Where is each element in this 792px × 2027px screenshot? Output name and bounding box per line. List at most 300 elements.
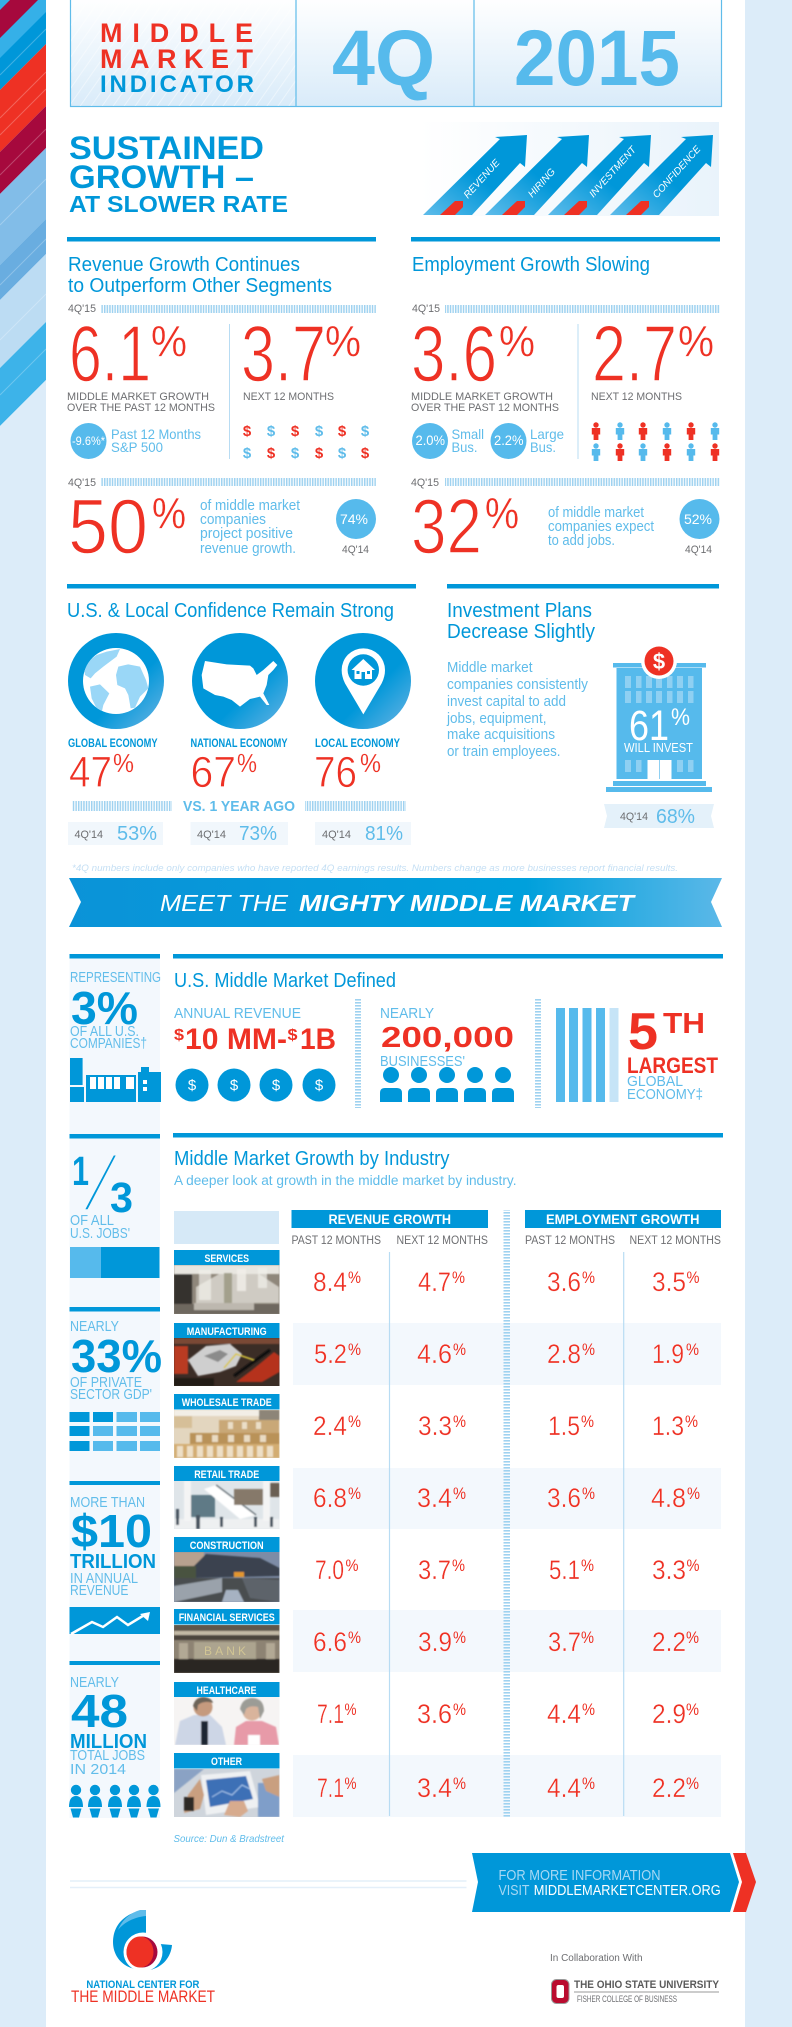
stat: 5th largest global economy: TH — [663, 1008, 705, 1040]
icon grid: dollar signs: $ — [243, 445, 252, 462]
category label: healthcare: HEALTHCARE — [196, 1685, 256, 1697]
row: services — [174, 1250, 700, 1314]
values: other: 3.4 — [417, 1773, 452, 1803]
sidebar: one third of jobs: 3 — [110, 1174, 133, 1222]
year: 2015 — [514, 13, 680, 102]
label: vs 1 year ago — [72, 798, 406, 815]
values: services: % — [686, 1268, 700, 1287]
category label: construction: CONSTRUCTION — [190, 1540, 264, 1552]
stat: 2.7 percent: 2.7 — [592, 309, 677, 398]
icon grid: people — [592, 422, 719, 461]
values: wholesale trade: 2.4 — [313, 1411, 347, 1441]
stat: local economy — [314, 736, 400, 797]
comparison: investment 4Q14: 68% — [656, 806, 695, 828]
panel: middle market growth by industry — [173, 1133, 723, 1817]
category label: services: SERVICES — [204, 1253, 249, 1265]
stat: annual revenue: $ — [188, 1077, 197, 1094]
left decorative stripes — [0, 0, 46, 426]
values: financial services: % — [686, 1628, 699, 1647]
table header: revenue growth: REVENUE GROWTH — [328, 1212, 451, 1227]
headline: sustained growth — [69, 130, 288, 217]
caption: past 12 months: OVER THE PAST 12 MONTHS — [67, 402, 215, 414]
values: other: 7.1 — [317, 1773, 344, 1803]
row: other — [174, 1753, 699, 1817]
stat: annual revenue: $ — [288, 1027, 298, 1044]
row: healthcare — [174, 1682, 699, 1745]
icon grid: dollar signs: $ — [361, 423, 370, 440]
sidebar: one third of jobs: 1 — [72, 1148, 89, 1194]
comparison: local 4Q14: 81% — [365, 823, 403, 845]
stat: national economy — [190, 736, 288, 797]
sidebar: 10 trillion revenue: TRILLION — [70, 1551, 156, 1573]
values: retail trade: 3.4 — [417, 1483, 452, 1513]
callout: small business — [412, 423, 484, 459]
values: healthcare: % — [582, 1700, 595, 1719]
values: retail trade: % — [687, 1484, 700, 1503]
chart: five bars — [556, 1008, 618, 1102]
callout: large business: Bus. — [530, 439, 556, 455]
call to action arrow: VISIT — [498, 1883, 530, 1899]
sidebar: 48 million jobs: TOTAL JOBS — [70, 1747, 145, 1764]
callout: large business — [490, 423, 564, 459]
caption: next 12 months: NEXT 12 MONTHS — [243, 391, 334, 403]
icon grid: dollar signs: $ — [291, 445, 300, 462]
sidebar: one third of jobs: / — [79, 1139, 123, 1228]
comparison: global 4Q14 — [68, 822, 163, 845]
banner: meet the mighty middle market: MEET THE — [160, 890, 288, 916]
icon grid: dollar signs: $ — [243, 423, 252, 440]
stat: 50 percent: 50 — [68, 482, 148, 570]
caption: past 12 months: MIDDLE MARKET GROWTH — [67, 391, 209, 403]
icon grid: dollar signs: $ — [315, 445, 324, 462]
sidebar: 3 percent of companies — [70, 954, 161, 1102]
category label: other: OTHER — [211, 1756, 242, 1768]
values: wholesale trade: 3.3 — [418, 1411, 452, 1441]
values: financial services — [313, 1627, 699, 1657]
stat: 5th largest global economy — [627, 1003, 718, 1103]
stat: 32 percent: 32 — [411, 482, 482, 570]
sidebar: 10 trillion revenue: IN ANNUAL — [70, 1570, 138, 1587]
stat: global economy: % — [113, 748, 134, 778]
sidebar: 33 percent of GDP — [70, 1307, 162, 1451]
stat: annual revenue: $ — [230, 1077, 239, 1094]
text: investment description: Middle market — [447, 660, 532, 676]
category label: financial services: FINANCIAL SERVICES — [179, 1612, 275, 1624]
comparison: local 4Q14: 4Q'14 — [322, 829, 351, 841]
stat: annual revenue: 10 MM- — [185, 1023, 287, 1056]
photo: dining table — [174, 1265, 280, 1314]
icon grid: dollar signs: $ — [291, 423, 300, 440]
values: other: % — [453, 1774, 466, 1793]
values: manufacturing: 5.2 — [314, 1339, 347, 1369]
panel: investment plans — [446, 584, 719, 828]
stat: annual revenue: 1B — [300, 1023, 336, 1056]
heading: investment plans: Decrease Slightly — [447, 621, 595, 643]
sidebar: 48 million jobs — [69, 1661, 160, 1818]
text: investment description: make acquisitions — [447, 727, 555, 743]
text: investment description: invest capital to add — [447, 694, 566, 710]
callout: small business: Small — [452, 426, 484, 442]
table header: employment growth: EMPLOYMENT GROWTH — [546, 1212, 700, 1227]
values: manufacturing: % — [453, 1340, 466, 1359]
values: services: 4.7 — [418, 1267, 451, 1297]
arrows graphic: HIRING — [526, 166, 558, 200]
banner: meet the mighty middle market — [69, 878, 722, 927]
category label: construction — [174, 1537, 280, 1552]
values: retail trade: % — [348, 1484, 361, 1503]
table header: revenue growth: NEXT 12 MONTHS — [396, 1233, 488, 1247]
values: financial services: % — [348, 1628, 361, 1647]
values: retail trade: 4.8 — [651, 1483, 686, 1513]
logo: national center for the middle market — [71, 1910, 215, 2006]
values: healthcare: % — [686, 1700, 699, 1719]
sidebar: 10 trillion revenue — [70, 1481, 160, 1634]
heading: revenue growth: to Outperform Other Segments — [68, 275, 332, 297]
icon grid: dollar signs: $ — [267, 445, 276, 462]
arrows graphic: INVESTMENT — [587, 144, 639, 200]
heading: growth by industry: Middle Market Growth by Industry — [174, 1148, 450, 1170]
panel: employment growth — [411, 237, 720, 570]
title: middle market indicator — [100, 18, 254, 98]
table header empty cell — [174, 1211, 279, 1244]
text: project positive revenue growth: revenue growth. — [200, 540, 296, 557]
icon: location pin — [315, 633, 411, 729]
stat: annual revenue — [174, 1005, 336, 1102]
header box — [70, 0, 722, 106]
stat: local economy: 76 — [314, 748, 357, 797]
panel: revenue growth — [67, 237, 376, 570]
stat: annual revenue: $ — [174, 1027, 184, 1044]
values: wholesale trade: % — [453, 1412, 466, 1431]
icon: globe — [68, 633, 164, 729]
stat: 6.1 percent: % — [151, 317, 187, 366]
caption: past 12 months: MIDDLE MARKET GROWTH — [411, 391, 553, 403]
headline: sustained growth: GROWTH – — [69, 159, 254, 195]
values: wholesale trade: 1.5 — [548, 1411, 580, 1441]
icon grid: dollar signs — [243, 423, 370, 462]
values: construction: 5.1 — [549, 1555, 580, 1585]
heading: confidence: U.S. & Local Confidence Remain Strong — [67, 600, 394, 622]
text: project positive revenue growth — [200, 497, 301, 557]
quarter: 4Q — [332, 13, 435, 102]
sidebar: 33 percent of GDP: NEARLY — [70, 1318, 119, 1335]
category label: wholesale trade: WHOLESALE TRADE — [182, 1397, 272, 1409]
callout: small business: 2.0% — [416, 432, 445, 448]
heading: employment growth: Employment Growth Slowing — [412, 254, 650, 276]
headline: sustained growth: AT SLOWER RATE — [69, 191, 288, 217]
callout: 74 percent 4Q14: 74% — [340, 511, 368, 527]
photo: warehouse boxes — [174, 1410, 280, 1458]
category label: wholesale trade — [174, 1394, 280, 1410]
panel: US middle market defined — [173, 954, 723, 1108]
table header: employment growth — [525, 1210, 721, 1247]
values: healthcare: 2.9 — [652, 1699, 686, 1729]
text: investment description: companies consistently — [447, 677, 589, 693]
icon: block grid — [70, 1412, 160, 1451]
panel: confidence — [67, 584, 416, 845]
stat: local economy: LOCAL ECONOMY — [315, 736, 400, 750]
sidebar: 48 million jobs: 48 — [71, 1685, 128, 1737]
values: other: 4.4 — [547, 1773, 581, 1803]
values: wholesale trade: % — [581, 1412, 594, 1431]
values: healthcare: 3.6 — [417, 1699, 452, 1729]
icon grid: dollar signs: $ — [338, 445, 347, 462]
callout: S&P 500: Past 12 Months — [111, 426, 201, 442]
comparison: national 4Q14: 4Q'14 — [197, 829, 226, 841]
logo: Ohio State University: THE OHIO STATE UNIVERSITY — [574, 1979, 720, 1991]
icon: five people — [69, 1785, 160, 1818]
panel: employment growth: 4Q'15 — [412, 303, 440, 315]
panel: revenue growth: 4Q'15 — [68, 303, 96, 315]
values: construction: % — [452, 1556, 465, 1575]
stat: 5th largest global economy: GLOBAL — [627, 1073, 683, 1090]
call to action arrow: FOR MORE INFORMATION — [498, 1868, 660, 1884]
comparison: national 4Q14 — [190, 822, 288, 845]
values: wholesale trade: % — [348, 1412, 361, 1431]
category label: financial services — [174, 1609, 280, 1624]
comparison: global 4Q14: 53% — [117, 823, 157, 845]
icon: building 61 percent will invest: % — [671, 704, 690, 731]
callout: large business: 2.2% — [494, 432, 524, 448]
values: construction: % — [346, 1556, 358, 1575]
callout: S&P 500 — [70, 423, 201, 459]
row: retail trade — [174, 1466, 700, 1529]
icon grid: dollar signs: $ — [315, 423, 324, 440]
callout: 74 percent 4Q14 — [336, 499, 376, 556]
collaboration label: In Collaboration With — [550, 1953, 642, 1964]
values: manufacturing: 1.9 — [652, 1339, 684, 1369]
icon: building 61 percent will invest: 61 — [629, 702, 669, 750]
text: investment description: jobs, equipment, — [446, 711, 546, 727]
icon: factory — [70, 1058, 161, 1102]
comparison: global 4Q14: 4Q'14 — [74, 829, 103, 841]
values: manufacturing: 2.8 — [547, 1339, 581, 1369]
icon: building 61 percent will invest — [606, 643, 712, 792]
category label: manufacturing: MANUFACTURING — [187, 1326, 267, 1338]
panel: revenue growth: 4Q'15 — [68, 477, 96, 489]
values: construction: % — [686, 1556, 700, 1575]
values: wholesale trade — [313, 1411, 698, 1441]
stat: 2.7 percent: % — [678, 317, 714, 366]
values: financial services: 6.6 — [313, 1627, 347, 1657]
photo: bank facade: BANK — [204, 1644, 246, 1658]
stat: global economy: 47 — [69, 748, 112, 797]
title: middle market indicator: INDICATOR — [100, 71, 254, 98]
values: construction — [315, 1555, 700, 1585]
panel: employment growth: 4Q'15 — [411, 477, 439, 489]
logo: Ohio State University: FISHER COLLEGE OF BUSINESS — [577, 1994, 677, 2004]
caption: past 12 months — [67, 391, 215, 414]
icon grid: dollar signs: $ — [267, 423, 276, 440]
stat: annual revenue: $ — [315, 1077, 324, 1094]
values: retail trade: 3.6 — [547, 1483, 581, 1513]
text: expect to add jobs: of middle market — [548, 504, 645, 521]
title: middle market indicator: MIDDLE — [100, 18, 253, 48]
banner: meet the mighty middle market: MIGHTY MIDDLE MARKET — [299, 890, 636, 916]
values: other: % — [582, 1774, 595, 1793]
stat: nearly 200,000 businesses: BUSINESSES' — [380, 1053, 465, 1070]
values: healthcare: 7.1 — [317, 1699, 344, 1729]
text: project positive revenue growth: project positive — [200, 525, 293, 542]
category label: manufacturing — [174, 1323, 280, 1338]
text: investment description — [446, 660, 589, 760]
subheading: A deeper look at growth in the middle market by industry. — [174, 1173, 516, 1188]
values: financial services: 3.7 — [548, 1627, 581, 1657]
icon: building 61 percent will invest: $ — [653, 649, 665, 674]
photo: construction site — [174, 1552, 280, 1602]
headline: sustained growth: SUSTAINED — [69, 130, 264, 166]
sidebar: one third of jobs — [70, 1134, 160, 1278]
photo: robotic car assembly — [174, 1338, 280, 1386]
table row bands — [293, 1323, 721, 1817]
sidebar: 3 percent of companies: COMPANIES† — [70, 1035, 147, 1052]
heading: investment plans — [447, 600, 595, 643]
photo: doctor and patient — [174, 1697, 280, 1745]
stat: 3.7 percent: % — [325, 317, 361, 366]
values: financial services: 2.2 — [652, 1627, 686, 1657]
caption: past 12 months: OVER THE PAST 12 MONTHS — [411, 402, 559, 414]
stat: local economy: % — [360, 748, 381, 778]
call to action arrow — [472, 1853, 756, 1912]
sidebar: 33 percent of GDP: 33% — [71, 1330, 162, 1382]
sidebar: 3 percent of companies: OF ALL U.S. — [70, 1023, 139, 1040]
values: services: % — [582, 1268, 595, 1287]
row: construction — [174, 1537, 700, 1602]
values: construction: % — [581, 1556, 594, 1575]
callout: 74 percent 4Q14: 4Q'14 — [342, 544, 369, 556]
icon: building 61 percent will invest: WILL INVEST — [624, 740, 693, 755]
stat: nearly 200,000 businesses: NEARLY — [380, 1005, 434, 1022]
icon grid: dollar signs: $ — [338, 423, 347, 440]
values: other — [317, 1773, 699, 1803]
callout: S&P 500: S&P 500 — [111, 439, 163, 455]
text: expect to add jobs: companies expect — [548, 518, 655, 535]
values: construction: 7.0 — [315, 1555, 344, 1585]
callout: 52 percent 4Q14: 52% — [684, 511, 712, 527]
values: construction: 3.3 — [652, 1555, 686, 1585]
values: manufacturing — [314, 1339, 699, 1369]
row: wholesale trade — [174, 1394, 698, 1458]
values: services: % — [452, 1268, 465, 1287]
call to action arrow: MIDDLEMARKETCENTER.ORG — [534, 1883, 721, 1899]
comparison: investment 4Q14: 4Q'14 — [620, 811, 648, 823]
callout: 52 percent 4Q14 — [680, 499, 720, 556]
table header: employment growth: PAST 12 MONTHS — [525, 1233, 615, 1247]
logo: national center for the middle market: NATIONAL CENTER FOR — [86, 1979, 199, 1991]
values: healthcare: 4.4 — [547, 1699, 581, 1729]
sidebar: one third of jobs: OF ALL — [70, 1212, 114, 1229]
text: project positive revenue growth: of middle market — [200, 497, 301, 514]
row: financial services — [174, 1609, 699, 1673]
category label: healthcare — [174, 1682, 280, 1698]
stat: 5th largest global economy: 5 — [628, 1003, 658, 1061]
values: retail trade: % — [582, 1484, 595, 1503]
values: construction: 3.7 — [418, 1555, 451, 1585]
stat: national economy: 67 — [190, 748, 236, 797]
sidebar: 3 percent of companies: REPRESENTING — [70, 969, 161, 986]
values: services: 3.5 — [652, 1267, 686, 1297]
icon grid: dollar signs: $ — [361, 445, 370, 462]
stat: national economy: NATIONAL ECONOMY — [190, 736, 288, 750]
stat: 5th largest global economy: ECONOMY‡ — [627, 1086, 703, 1103]
sidebar: 10 trillion revenue: REVENUE — [70, 1582, 128, 1599]
sidebar: 3 percent of companies: 3% — [71, 982, 138, 1034]
values: services: 3.6 — [547, 1267, 581, 1297]
comparison: national 4Q14: 73% — [239, 823, 277, 845]
icon: USA map — [192, 633, 288, 729]
table column dividers — [390, 1210, 624, 1817]
values: healthcare — [317, 1699, 699, 1729]
category label: other — [174, 1753, 280, 1768]
photo: bank facade — [174, 1625, 280, 1673]
sidebar: one third of jobs: U.S. JOBS' — [70, 1225, 130, 1242]
stat: nearly 200,000 businesses — [380, 1005, 514, 1102]
values: other: 2.2 — [652, 1773, 686, 1803]
heading: investment plans: Investment Plans — [447, 600, 592, 622]
stat: annual revenue: $ — [272, 1077, 281, 1094]
table header: revenue growth: PAST 12 MONTHS — [292, 1233, 381, 1247]
comparison: local 4Q14 — [315, 822, 411, 845]
text: investment description: or train employees. — [447, 744, 560, 760]
row: manufacturing — [174, 1323, 699, 1386]
comparison: investment 4Q14 — [604, 804, 714, 828]
stat: 3.6 percent: % — [499, 317, 535, 366]
callout: large business: Large — [530, 426, 564, 442]
source note: Source: Dun & Bradstreet — [174, 1833, 285, 1845]
sidebar: 48 million jobs: IN 2014 — [70, 1761, 126, 1778]
stat: 6.1 percent: 6.1 — [69, 309, 151, 398]
values: financial services: % — [581, 1628, 594, 1647]
arrows graphic — [420, 122, 719, 216]
heading: revenue growth — [68, 254, 332, 297]
values: manufacturing: % — [348, 1340, 361, 1359]
values: services: 8.4 — [313, 1267, 347, 1297]
footnote: *4Q numbers include only companies who have reported 4Q earnings results. Numbers change as more businesses report financial results. — [72, 863, 678, 874]
caption: past 12 months — [411, 391, 559, 414]
values: other: % — [344, 1774, 356, 1793]
table header: revenue growth — [292, 1210, 488, 1247]
sidebar: 33 percent of GDP: SECTOR GDP' — [70, 1386, 152, 1403]
icon: rising chart arrow — [70, 1607, 160, 1634]
values: manufacturing: % — [686, 1340, 699, 1359]
values: wholesale trade: % — [685, 1412, 698, 1431]
stat: 3.6 percent: 3.6 — [411, 309, 497, 398]
stat: 5th largest global economy: LARGEST — [627, 1053, 718, 1078]
stat: global economy: GLOBAL ECONOMY — [68, 736, 158, 750]
stat: global economy — [68, 736, 158, 797]
arrows graphic: REVENUE — [462, 157, 503, 201]
text: expect to add jobs: to add jobs. — [548, 532, 615, 549]
values: retail trade: 6.8 — [313, 1483, 347, 1513]
table header: employment growth: NEXT 12 MONTHS — [630, 1233, 721, 1247]
icon: one third bar — [70, 1247, 160, 1278]
callout: small business: Bus. — [452, 439, 478, 455]
values: healthcare: % — [344, 1700, 356, 1719]
sidebar: 48 million jobs: NEARLY — [70, 1674, 119, 1691]
values: services: % — [348, 1268, 361, 1287]
callout: 52 percent 4Q14: 4Q'14 — [685, 544, 712, 556]
logo: Ohio State University — [552, 1979, 720, 2004]
values: healthcare: % — [453, 1700, 466, 1719]
text: project positive revenue growth: companies — [200, 511, 266, 528]
heading: defined: U.S. Middle Market Defined — [174, 970, 396, 992]
stat: nearly 200,000 businesses: 200,000 — [381, 1022, 514, 1054]
values: manufacturing: % — [582, 1340, 595, 1359]
values: services — [313, 1267, 700, 1297]
callout: S&P 500: -9.6%* — [72, 434, 105, 448]
photo: tablet with charts — [174, 1769, 280, 1817]
photo: shopping mall — [174, 1481, 280, 1529]
